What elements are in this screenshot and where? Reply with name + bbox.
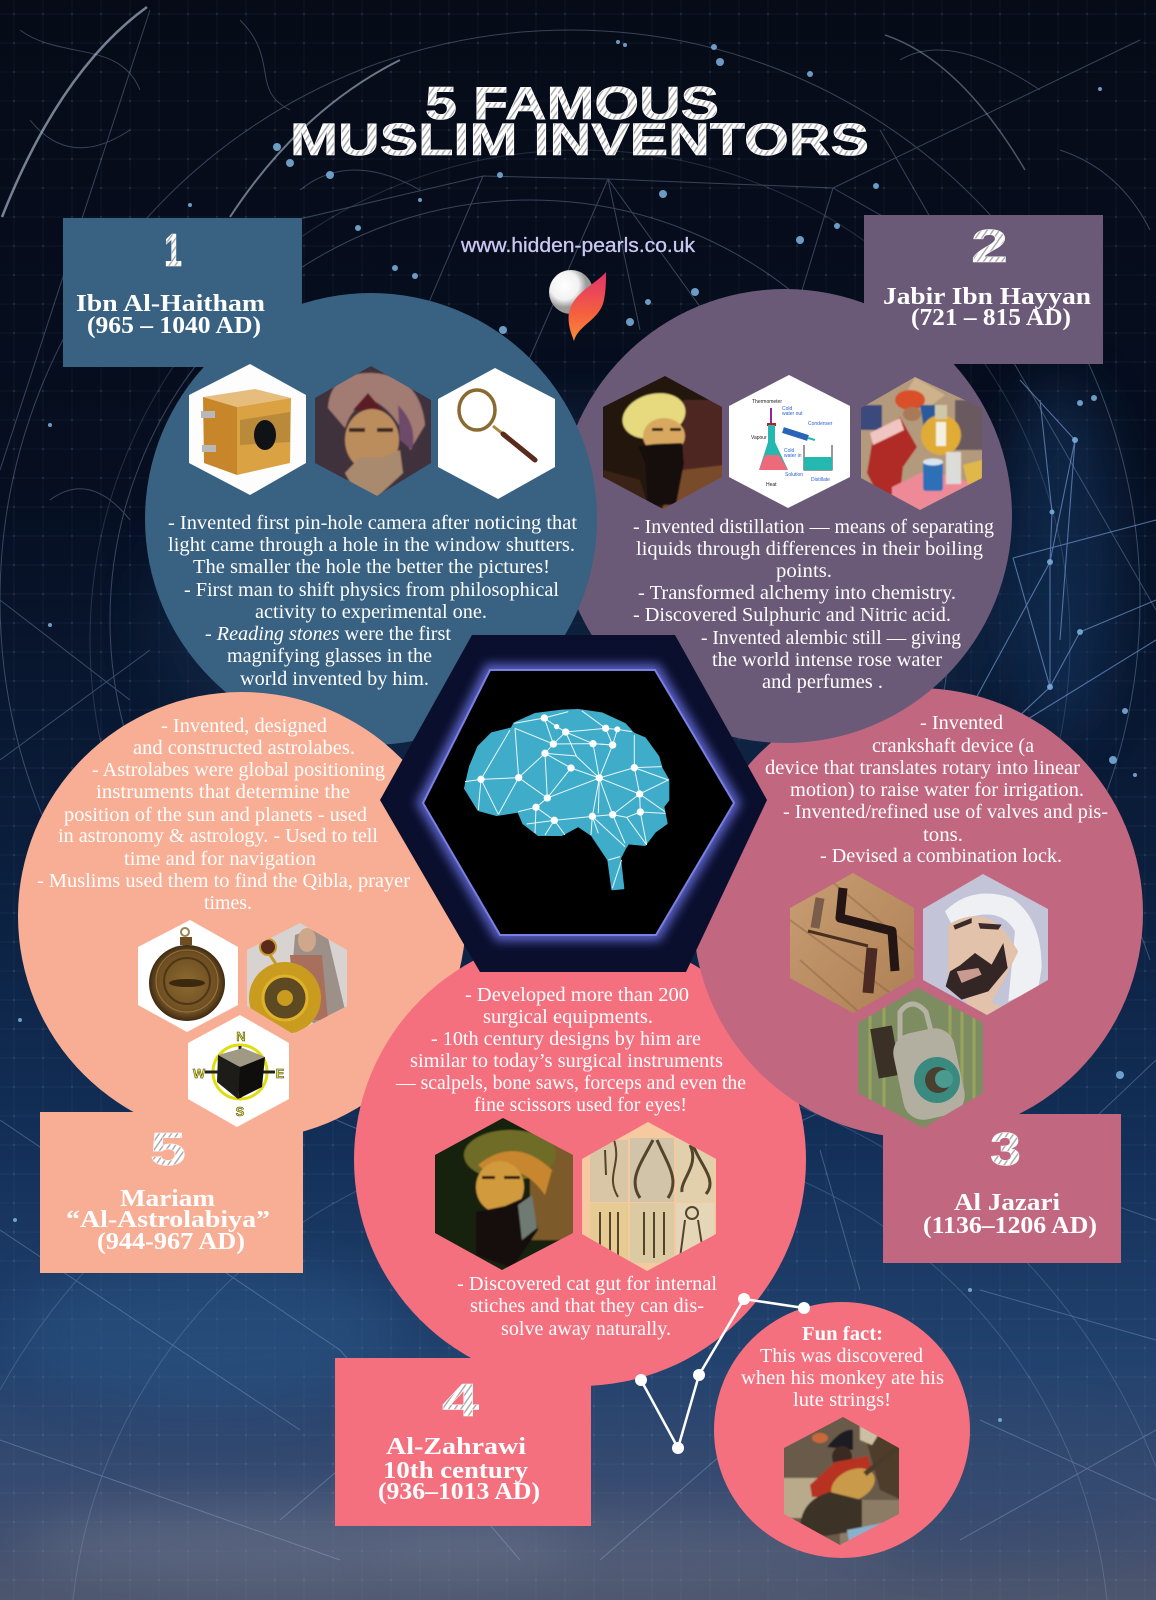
text: astrolabes: instruments that determine the (96, 781, 350, 803)
name: Al Jazari (923, 1190, 1097, 1239)
text: surgical equipment: surgical equipments. (483, 1006, 653, 1028)
image: pin-hole camera (189, 364, 306, 495)
text: astrolabes: - Astrolabes were global positioning (92, 759, 385, 781)
panel: 1 Ibn Al-Haitham (63, 218, 597, 745)
text: Ibn Al-Haitham achievements (168, 512, 577, 690)
name: Al Jazari: (1136–1206 AD) (923, 1213, 1097, 1239)
text: cat gut: solve away naturally. (501, 1318, 671, 1340)
text: astrolabes: time and for navigation (124, 848, 316, 870)
panel: fun fact (714, 1302, 970, 1558)
central hexagon with glowing border (380, 635, 767, 972)
text: surgical equipment: - Developed more than 200 (465, 984, 689, 1006)
text: Ibn Al-Haitham achievements: activity to experimental one. (255, 601, 487, 623)
name: Al Jazari: Al Jazari (954, 1190, 1060, 1216)
image: distillation diagram: Thermometer (752, 399, 782, 405)
image: distillation diagram: Vapour (751, 435, 767, 441)
name: Al-Zahrawi: (936–1013 AD) (378, 1479, 540, 1505)
text: surgical equipment: similar to today’s surgical instruments (410, 1050, 723, 1072)
image: portrait of Ibn Al-Haitham (315, 366, 431, 496)
text: Jabir achievements: and perfumes . (762, 671, 883, 693)
image: distillation diagram: Heat (766, 482, 777, 488)
text: astrolabes: - Muslims used them to find the Qibla, prayer (37, 870, 410, 892)
text: cat gut (457, 1273, 717, 1340)
title: 5 FAMOUS (425, 77, 719, 129)
image: Kaaba compass: N (236, 1029, 246, 1044)
image: distillation diagram: Condenser (808, 421, 833, 427)
text: astrolabes (37, 715, 410, 914)
image: distillation diagram (729, 375, 850, 508)
image: Mariam with astrolabe (247, 923, 347, 1034)
text: fun fact: This was discovered (760, 1345, 923, 1367)
image: magnifying glass (438, 368, 555, 499)
text: astrolabes: in astronomy & astrology. - Used to tell (58, 825, 378, 847)
text: crankshaft: motion) to raise water for irrigation. (790, 779, 1084, 801)
image: crankshaft device (785, 870, 917, 1016)
image: distillation diagram: water out (782, 411, 803, 417)
title (290, 77, 869, 165)
text: fun fact (741, 1323, 944, 1411)
number 5: 5 (150, 1123, 186, 1175)
number 3: 3 (990, 1123, 1021, 1175)
text: crankshaft: - Devised a combination lock. (820, 845, 1062, 867)
text: fun fact: lute strings! (793, 1389, 891, 1411)
text: crankshaft: - Invented (920, 712, 1003, 734)
text: Ibn Al-Haitham achievements: - First man to shift physics from philosophical (184, 579, 559, 601)
text: crankshaft: crankshaft device (a (872, 735, 1034, 757)
website url: www.hidden-pearls.co.uk (460, 235, 696, 257)
text: surgical equipment: — scalpels, bone saws, forceps and even the (395, 1072, 746, 1094)
image: distillation diagram: water in (784, 453, 802, 459)
text: Ibn Al-Haitham achievements: - Reading stones were the first (205, 623, 451, 645)
icon: pearl logo (549, 270, 606, 341)
image: distillation diagram: Distillate (811, 477, 830, 483)
image: monkey with lute (780, 1414, 902, 1548)
name: Mariam Al-Astrolabiya: “Al-Astrolabiya” (66, 1207, 270, 1233)
name: Ibn Al-Haitham: Ibn Al-Haitham (76, 291, 265, 317)
image: distillation diagram: Cold (782, 406, 793, 412)
text: crankshaft: device that translates rotary into linear (765, 757, 1080, 779)
text: cat gut: - Discovered cat gut for internal (457, 1273, 717, 1295)
text: fun fact: when his monkey ate his (741, 1367, 944, 1389)
number 1: 1 (164, 224, 182, 276)
text: fun fact: Fun fact: (802, 1323, 883, 1345)
image: Kaaba compass (188, 1015, 289, 1127)
text: Jabir achievements: - Discovered Sulphuric and Nitric acid. (633, 604, 951, 626)
text: Ibn Al-Haitham achievements: - Invented first pin-hole camera after noticing that (168, 512, 577, 534)
text: crankshaft (765, 712, 1108, 867)
text: Ibn Al-Haitham achievements: magnifying glasses in the (227, 645, 432, 667)
icon: network brain (465, 710, 668, 889)
text: Jabir achievements: - Invented alembic still — giving (701, 627, 961, 649)
name: Al-Zahrawi: Al-Zahrawi (386, 1434, 526, 1460)
image: Kaaba compass: S (236, 1104, 245, 1119)
text: surgical equipment: - 10th century designs by him are (431, 1028, 701, 1050)
text: Jabir achievements: points. (776, 560, 832, 582)
text: cat gut: stiches and that they can dis- (470, 1295, 704, 1317)
panel: 3 Al Jazari (693, 688, 1143, 1263)
image: Kaaba compass: W (193, 1066, 206, 1081)
text: Jabir achievements: - Invented distillation — means of separating (633, 516, 994, 538)
text: Jabir achievements: - Transformed alchemy into chemistry. (638, 582, 956, 604)
text: Jabir achievements: the world intense rose water (712, 649, 942, 671)
name: Jabir Ibn Hayyan: Jabir Ibn Hayyan (883, 284, 1091, 310)
text: surgical equipment: fine scissors used for eyes! (474, 1094, 687, 1116)
image: combination lock (855, 985, 987, 1131)
name: Mariam Al-Astrolabiya: Mariam (120, 1186, 215, 1212)
text: astrolabes: and constructed astrolabes. (133, 737, 355, 759)
panel: 4 Al-Zahrawi (335, 934, 806, 1526)
text: Ibn Al-Haitham achievements: world invented by him. (240, 668, 429, 690)
text: surgical equipment (395, 984, 746, 1116)
name: Mariam Al-Astrolabiya (66, 1186, 270, 1255)
panel: 5 Mariam Al-Astrolabiya (18, 692, 466, 1273)
panel: 2 Jabir Ibn Hayyan (558, 215, 1103, 743)
name: Ibn Al-Haitham (76, 291, 265, 339)
text: crankshaft: tons. (923, 824, 963, 846)
image: portrait of Al-Zahrawi (435, 1118, 573, 1270)
text: Jabir achievements (633, 516, 994, 693)
name: Ibn Al-Haitham: (965 – 1040 AD) (87, 313, 261, 339)
text: astrolabes: - Invented, designed (161, 715, 327, 737)
connector: constellation to fun fact (635, 1293, 810, 1454)
text: crankshaft: - Invented/refined use of valves and pis- (783, 801, 1108, 823)
text: Ibn Al-Haitham achievements: The smaller the hole the better the pictures! (193, 556, 550, 578)
name: Al-Zahrawi: 10th century (383, 1458, 528, 1484)
image: distillation diagram: Cold (784, 448, 795, 454)
image: surgical tools (580, 1120, 718, 1275)
name: Al-Zahrawi (378, 1434, 540, 1505)
name: Jabir Ibn Hayyan: (721 – 815 AD) (911, 305, 1071, 331)
image: astrolabe (138, 920, 238, 1032)
number 2: 2 (971, 220, 1008, 272)
title: MUSLIM INVENTORS (290, 114, 869, 165)
text: astrolabes: position of the sun and planets - used (64, 804, 367, 826)
text: Ibn Al-Haitham achievements: light came through a hole in the window shutters. (168, 534, 575, 556)
image: portrait of Jabir (600, 372, 725, 512)
image: distillation diagram: Solution (785, 472, 803, 478)
name: Jabir Ibn Hayyan (883, 284, 1091, 331)
number 4: 4 (442, 1374, 480, 1426)
image: alchemist at work (861, 377, 982, 510)
name: Mariam Al-Astrolabiya: (944-967 AD) (97, 1229, 245, 1255)
image: Kaaba compass: E (276, 1066, 285, 1081)
text: Jabir achievements: liquids through differences in their boiling (636, 538, 983, 560)
text: astrolabes: times. (204, 892, 252, 914)
image: portrait of Al Jazari (923, 874, 1048, 1015)
